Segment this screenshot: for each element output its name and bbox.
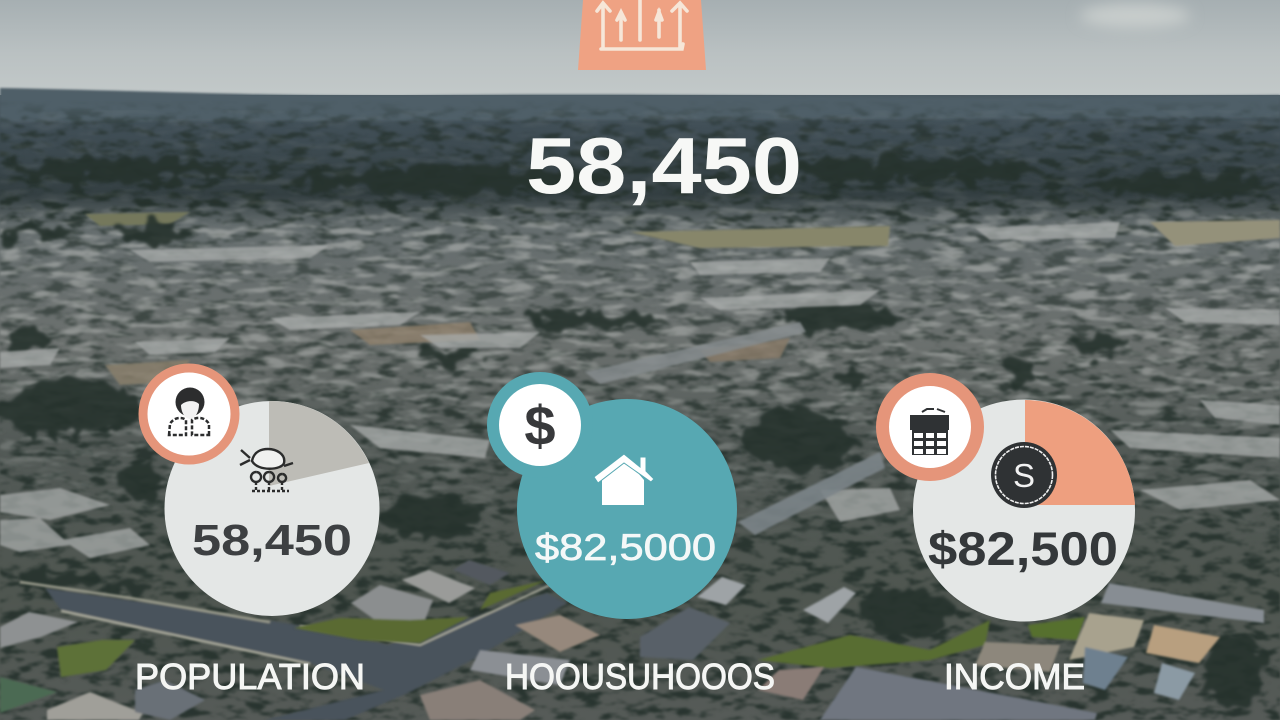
value: 58,450 (192, 516, 352, 565)
value: $82,500 (928, 522, 1118, 575)
badge ring (882, 380, 978, 474)
roads (20, 322, 1264, 720)
houses and lawns (0, 560, 1220, 720)
icon: dollar sign: $ (524, 394, 556, 457)
sky (0, 0, 1280, 98)
badge shape (578, 0, 706, 70)
panel: households (517, 399, 737, 619)
badge centre (499, 384, 581, 466)
pie base (164, 401, 380, 616)
panel: income (913, 400, 1135, 622)
badge: calendar icon (882, 380, 978, 474)
badge ring (143, 368, 235, 460)
main headline number: 58,450 (526, 121, 802, 210)
pie slice (269, 401, 369, 486)
panel: population (164, 401, 380, 616)
distant hills (0, 88, 1280, 122)
roof texture (0, 126, 1280, 520)
icon: people cluster (240, 449, 293, 491)
badge ring (487, 372, 593, 478)
badge: dollar icon (487, 372, 593, 478)
icon: person (169, 388, 209, 435)
icon: house with arrows (597, 0, 687, 49)
light roofs (0, 222, 1280, 558)
teal disc (517, 399, 737, 619)
icon: house (594, 454, 654, 505)
label: households: HOOUSUHOOOS (505, 656, 775, 697)
pie base (913, 400, 1135, 622)
icon: calendar (910, 409, 949, 455)
label: population: POPULATION (135, 656, 365, 697)
value: $82,5000 (535, 527, 716, 568)
fields (85, 212, 1280, 385)
badge: person icon (143, 368, 235, 460)
top icon badge (578, 0, 706, 70)
label: income: INCOME (944, 656, 1085, 697)
clouds (1080, 4, 1190, 28)
icon: dollar coin: S (1013, 457, 1035, 494)
icon: dollar coin (991, 442, 1057, 508)
pie slice (1025, 400, 1135, 505)
tree clusters (0, 158, 1270, 710)
